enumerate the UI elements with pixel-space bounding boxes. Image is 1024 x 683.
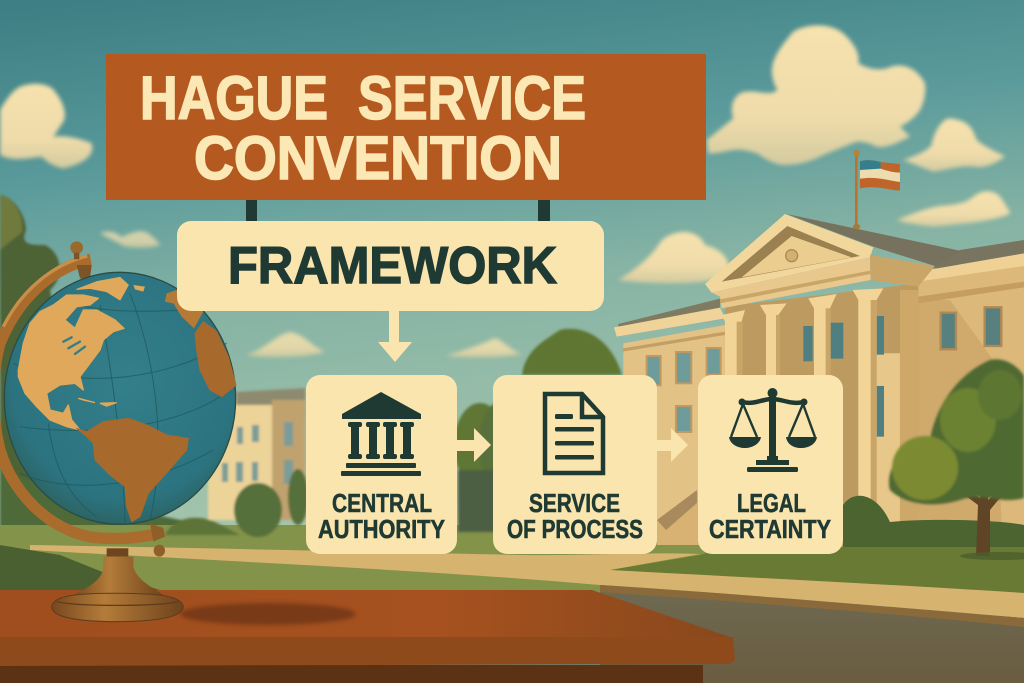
label xyxy=(507,488,643,544)
clouds xyxy=(0,25,1011,357)
table xyxy=(0,590,735,683)
title sign xyxy=(106,54,706,200)
pediment xyxy=(705,214,873,293)
right wing xyxy=(918,253,1024,557)
mid trees xyxy=(454,329,704,532)
label: AUTHORITY xyxy=(318,514,445,544)
path and road xyxy=(30,545,1024,618)
background trees left xyxy=(0,195,205,560)
label: LEGAL xyxy=(737,488,806,518)
stairs xyxy=(657,492,720,545)
title: HAGUE xyxy=(140,64,328,132)
label xyxy=(709,488,831,544)
graticule xyxy=(13,293,230,523)
lawn xyxy=(0,525,1024,600)
left building xyxy=(165,388,308,537)
panel: legal certainty xyxy=(698,375,843,554)
label: CENTRAL xyxy=(332,488,432,518)
columns xyxy=(722,288,883,573)
arrow: framework down xyxy=(378,311,412,362)
label xyxy=(318,488,445,544)
framework box xyxy=(177,221,604,311)
globe stand arc xyxy=(0,259,163,539)
stand bottom xyxy=(150,523,165,542)
flag xyxy=(860,160,900,191)
roof xyxy=(787,214,960,266)
North America xyxy=(18,295,124,430)
label: SERVICE xyxy=(529,488,620,518)
entablature xyxy=(712,257,871,308)
icon: scales of justice xyxy=(729,388,817,472)
South America xyxy=(77,418,188,522)
Europe xyxy=(150,278,203,328)
icon: institution building xyxy=(341,392,421,476)
flagpole xyxy=(855,153,858,227)
label: CERTAINTY xyxy=(709,514,831,544)
icon: globe on stand xyxy=(0,241,236,622)
Caribbean xyxy=(78,398,117,406)
panel: service of process xyxy=(493,375,657,554)
title xyxy=(140,64,586,192)
sign posts xyxy=(246,198,550,224)
title: CONVENTION xyxy=(194,124,562,192)
arrow: service to certainty xyxy=(657,428,688,462)
icon: document xyxy=(545,394,603,473)
arrow: authority to service xyxy=(457,428,491,462)
hedge and right lawn xyxy=(843,496,1024,550)
right tree xyxy=(889,359,1024,560)
title: SERVICE xyxy=(358,64,586,132)
portico back wall xyxy=(725,283,918,557)
table shadow of globe xyxy=(180,603,356,625)
panel: central authority xyxy=(306,375,457,554)
framework box: FRAMEWORK xyxy=(228,237,557,295)
main building xyxy=(614,150,1024,573)
left wing xyxy=(623,325,725,540)
label: OF PROCESS xyxy=(507,514,643,544)
Greenland xyxy=(77,277,128,300)
globe sphere xyxy=(4,272,236,524)
Africa xyxy=(195,322,236,397)
